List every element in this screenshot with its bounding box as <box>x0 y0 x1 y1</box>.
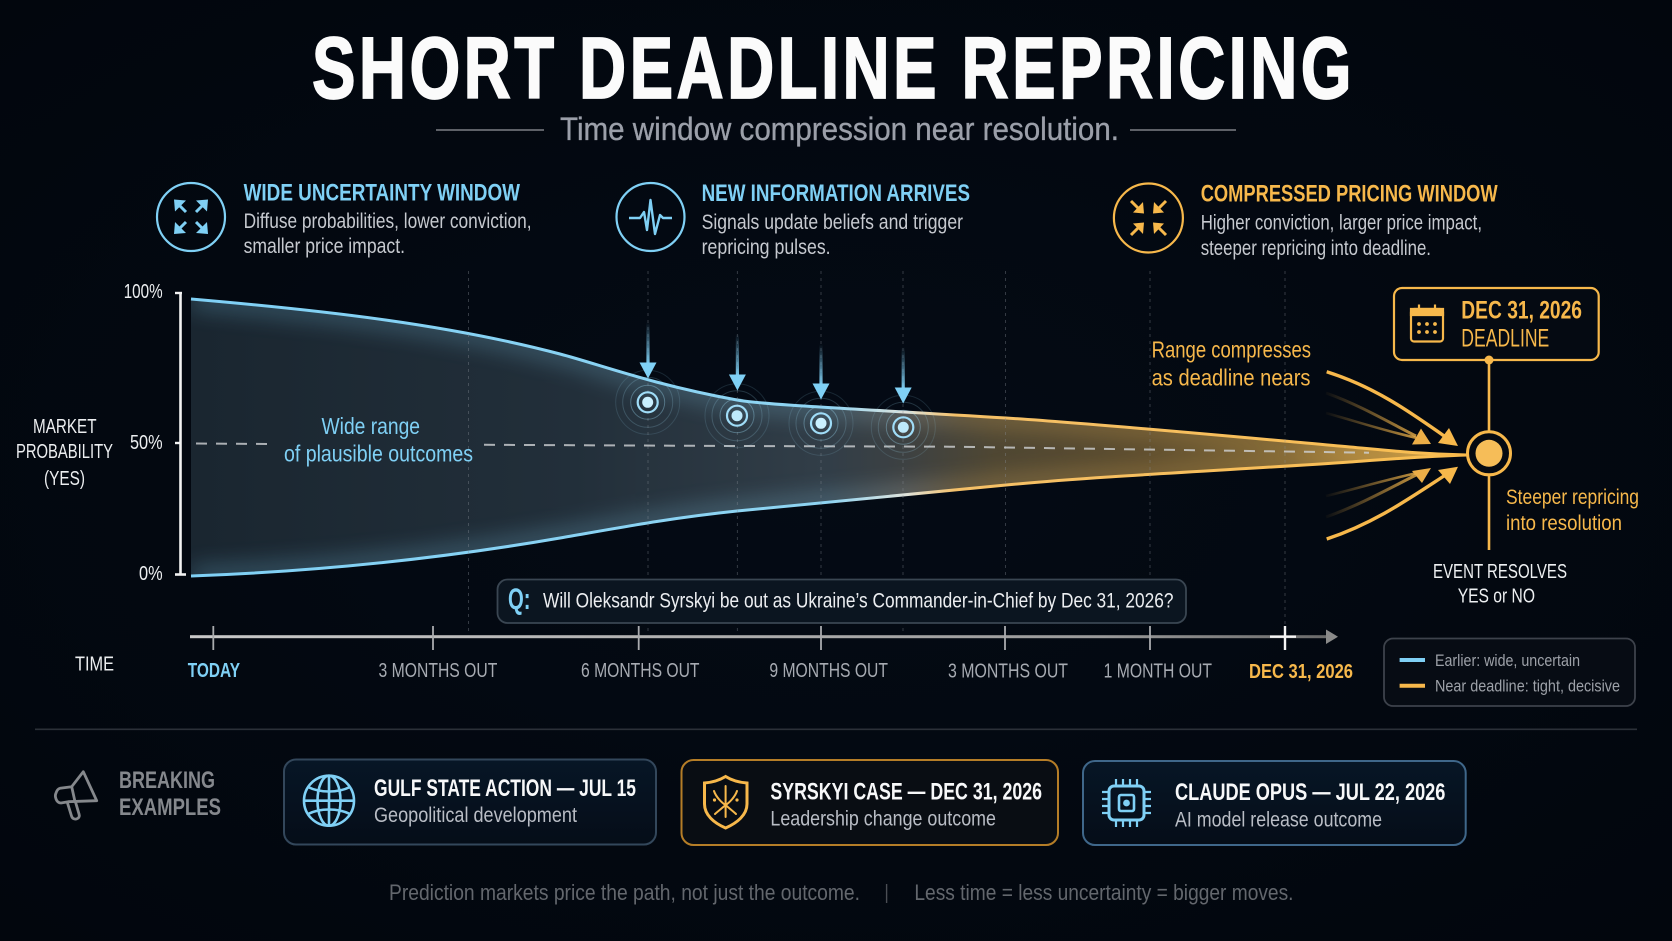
legend: Near deadline: tight, decisive <box>1435 677 1620 696</box>
deadline tick <box>1270 626 1296 650</box>
signal pulse 1 <box>616 370 680 434</box>
label text: EXAMPLES <box>119 794 221 821</box>
annotation: range compresses <box>1152 337 1311 391</box>
axis labels: TODAY <box>188 660 241 682</box>
arrow: signal 4 <box>895 347 912 404</box>
deadline marker with connector <box>1440 356 1510 550</box>
icon: chip <box>1102 779 1151 827</box>
y axis labels <box>124 281 163 585</box>
upper edge line <box>191 299 1467 455</box>
time axis <box>75 626 1353 683</box>
arrow: signal 2 <box>729 334 746 390</box>
question box <box>498 580 1186 623</box>
panel: new information arrives <box>616 180 970 259</box>
event resolves label <box>1433 561 1567 608</box>
axis labels: 3 MONTHS OUT <box>948 660 1068 682</box>
panel: compressed pricing window <box>1114 181 1498 260</box>
annotation: range compresses: Range compresses <box>1152 337 1311 363</box>
y axis title: (YES) <box>44 468 85 490</box>
signal pulse 4 <box>871 395 935 459</box>
description: compressed pricing window: Higher conviction, larger price impact, <box>1201 212 1482 235</box>
annotation: steeper repricing <box>1506 486 1639 535</box>
signal pulse 2 <box>705 384 769 448</box>
heading: compressed pricing window: COMPRESSED PRICING WINDOW <box>1201 181 1498 208</box>
description: new information arrives <box>702 211 963 259</box>
y axis <box>175 293 186 574</box>
footer takeaways: Prediction markets price the path, not just the outcome. <box>389 880 860 905</box>
annotation: wide range <box>284 413 473 467</box>
deadline label: DEADLINE <box>1461 325 1549 353</box>
legend: Earlier: wide, uncertain <box>1435 651 1580 670</box>
axis title: TIME <box>75 654 114 676</box>
description: new information arrives: Signals update beliefs and trigger <box>702 211 963 234</box>
title: SHORT DEADLINE REPRICING <box>312 20 1352 117</box>
label text <box>119 767 221 821</box>
axis line and arrow <box>190 630 1338 644</box>
axis labels <box>188 660 1353 683</box>
description: wide uncertainty window: smaller price impact. <box>244 235 405 258</box>
question box: Will Oleksandr Syrskyi be out as Ukraine’s Commander-in-Chief by Dec 31, 2026? <box>543 590 1174 613</box>
deadline date: DEC 31, 2026 <box>1461 296 1582 324</box>
subtitle with side rules: Time window compression near resolution. <box>560 111 1119 147</box>
icon: compress arrows <box>1114 184 1183 252</box>
axis labels: 3 MONTHS OUT <box>378 660 497 682</box>
card subtitle: AI model release outcome <box>1175 809 1382 832</box>
chart: probability cone <box>16 271 1467 635</box>
card subtitle: Leadership change outcome <box>770 808 996 831</box>
footer takeaways <box>389 880 1294 905</box>
description: wide uncertainty window <box>244 210 532 258</box>
y axis labels: 0% <box>139 563 163 585</box>
deadline box <box>1394 288 1599 360</box>
arrow: signal 1 <box>640 322 656 378</box>
event resolves label: EVENT RESOLVES <box>1433 561 1567 583</box>
icon: globe <box>304 776 354 826</box>
y axis labels: 100% <box>124 281 163 303</box>
heading: new information arrives: NEW INFORMATION ARRIVES <box>702 180 970 207</box>
axis labels: DEC 31, 2026 <box>1249 661 1353 683</box>
heading: wide uncertainty window: WIDE UNCERTAINTY WINDOW <box>244 180 520 207</box>
probability band <box>191 299 1467 576</box>
icon: calendar <box>1411 304 1443 342</box>
annotation: steeper repricing: Steeper repricing <box>1506 486 1639 509</box>
annotation: wide range: of plausible outcomes <box>284 441 473 467</box>
icon: shield <box>704 776 747 828</box>
description: wide uncertainty window: Diffuse probabilities, lower conviction, <box>244 210 532 233</box>
signal pulse 3 <box>789 391 853 455</box>
icon: megaphone <box>55 772 97 819</box>
card: syrskyi case <box>682 760 1058 845</box>
card: gulf state action <box>284 760 656 844</box>
annotation: range compresses: as deadline nears <box>1152 365 1310 391</box>
y axis title: PROBABILITY <box>16 441 113 463</box>
axis labels: 9 MONTHS OUT <box>769 660 888 682</box>
label text: BREAKING <box>119 767 215 794</box>
question box: Q: <box>508 583 530 616</box>
event resolves label: YES or NO <box>1458 586 1535 608</box>
arrow: signal 3 <box>812 344 830 400</box>
card: claude opus <box>1083 761 1466 845</box>
y axis title <box>16 416 113 490</box>
axis labels: 6 MONTHS OUT <box>581 660 700 682</box>
card title: SYRSKYI CASE — DEC 31, 2026 <box>770 778 1042 805</box>
lower edge line <box>191 455 1467 576</box>
description: compressed pricing window <box>1201 212 1482 260</box>
card title: GULF STATE ACTION — JUL 15 <box>374 775 636 802</box>
footer takeaways: Less time = less uncertainty = bigger moves. <box>914 880 1294 905</box>
description: new information arrives: repricing pulses. <box>702 236 831 259</box>
card subtitle: Geopolitical development <box>374 804 577 827</box>
breaking examples label <box>55 767 221 821</box>
legend <box>1384 638 1635 706</box>
arrows: converging into deadline <box>1326 372 1458 539</box>
panel: wide uncertainty window <box>157 180 532 258</box>
icon: expand arrows <box>157 183 225 251</box>
annotation: steeper repricing: into resolution <box>1506 512 1622 535</box>
card title: CLAUDE OPUS — JUL 22, 2026 <box>1175 779 1445 806</box>
axis labels: 1 MONTH OUT <box>1104 660 1212 682</box>
y axis title: MARKET <box>33 416 96 438</box>
annotation: wide range: Wide range <box>322 413 420 439</box>
description: compressed pricing window: steeper repricing into deadline. <box>1201 237 1431 260</box>
icon: pulse <box>616 183 684 251</box>
y axis labels: 50% <box>130 432 163 454</box>
